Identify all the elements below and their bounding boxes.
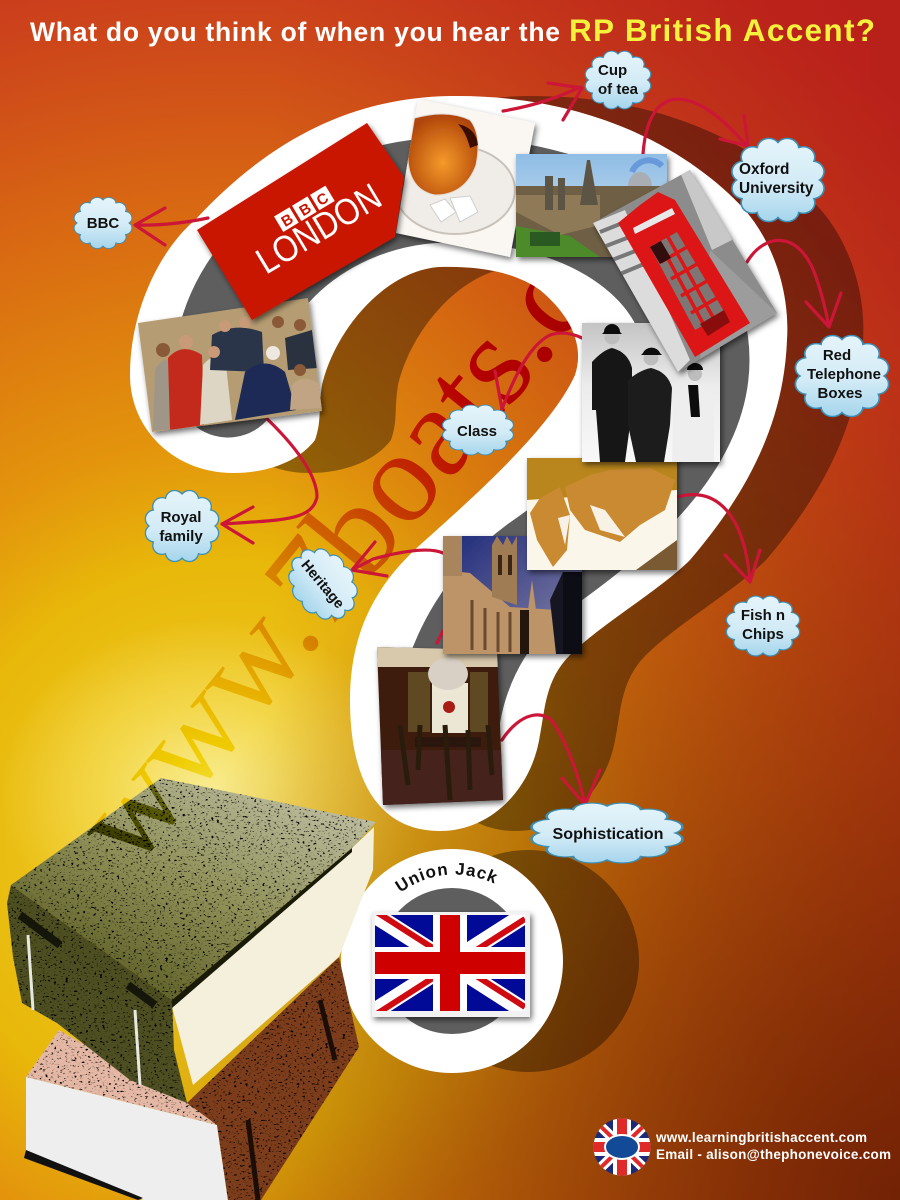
picture: BBC London: B — [296, 200, 315, 220]
cloud: Class: Class — [457, 423, 497, 440]
picture: BBC London: C — [314, 189, 332, 210]
picture: royal family — [138, 298, 322, 432]
cloud: Cup of tea — [585, 51, 651, 109]
question mark shadow — [206, 96, 863, 1072]
cloud: Heritage — [276, 536, 370, 632]
footer contact text — [655, 1130, 891, 1162]
picture: red telephone box — [593, 168, 777, 372]
cloud: Red Telephone Boxes: Red — [823, 347, 851, 364]
footer logo: flag with speech bubble — [594, 1118, 650, 1176]
arrows — [135, 83, 841, 805]
question mark — [130, 96, 787, 831]
cloud: Red Telephone Boxes — [795, 335, 889, 417]
cloud: Heritage: Heritage — [297, 557, 347, 612]
picture: heritage cathedral — [443, 536, 583, 654]
picture: BBC London: B — [278, 211, 297, 231]
picture: Oxford University — [516, 154, 667, 257]
picture: cup of tea — [395, 99, 535, 257]
website watermark: www.7boats.c — [44, 228, 618, 890]
cloud: Class — [442, 405, 514, 455]
upper book — [7, 778, 376, 1103]
cloud: Fish n Chips: Chips — [742, 626, 784, 643]
footer contact text: Email - alison@thephonevoice.com — [656, 1147, 891, 1162]
picture: fish and chips — [527, 458, 677, 570]
stacked books — [7, 778, 376, 1200]
cloud: Fish n Chips — [726, 596, 800, 656]
cloud: BBC — [74, 197, 132, 249]
cloud: Royal family: family — [159, 528, 203, 545]
cloud: Red Telephone Boxes: Boxes — [817, 385, 863, 402]
cloud: Royal family: Royal — [161, 509, 201, 526]
cloud: Cup of tea: of tea — [598, 81, 639, 98]
cloud: Fish n Chips: Fish n — [741, 607, 785, 624]
cloud: Royal family — [145, 490, 219, 562]
picture: BBC London — [197, 123, 404, 320]
cloud: Oxford University: Oxford — [739, 161, 789, 178]
title: RP British Accent? — [569, 12, 875, 48]
lower book — [24, 957, 359, 1200]
label: Union Jack: Union Jack — [394, 863, 498, 891]
cloud: Oxford University: University — [739, 180, 814, 197]
title: What do you think of when you hear the — [30, 17, 560, 47]
red phone box — [618, 192, 750, 357]
cloud: Sophistication — [532, 803, 682, 863]
title — [30, 12, 875, 48]
cloud: Cup of tea: Cup — [598, 62, 627, 79]
cloud: Red Telephone Boxes: Telephone — [807, 366, 881, 383]
picture: dining room — [377, 645, 505, 810]
picture: BBC London: LONDON — [249, 176, 388, 282]
cloud: Oxford University — [732, 138, 824, 222]
cloud: Sophistication: Sophistication — [552, 826, 664, 843]
picture: Union Jack flag — [372, 911, 530, 1017]
picture: class, three men — [582, 323, 720, 462]
question mark dot — [341, 849, 563, 1073]
footer contact text: www.learningbritishaccent.com — [655, 1130, 867, 1145]
cloud: BBC: BBC — [87, 215, 119, 232]
